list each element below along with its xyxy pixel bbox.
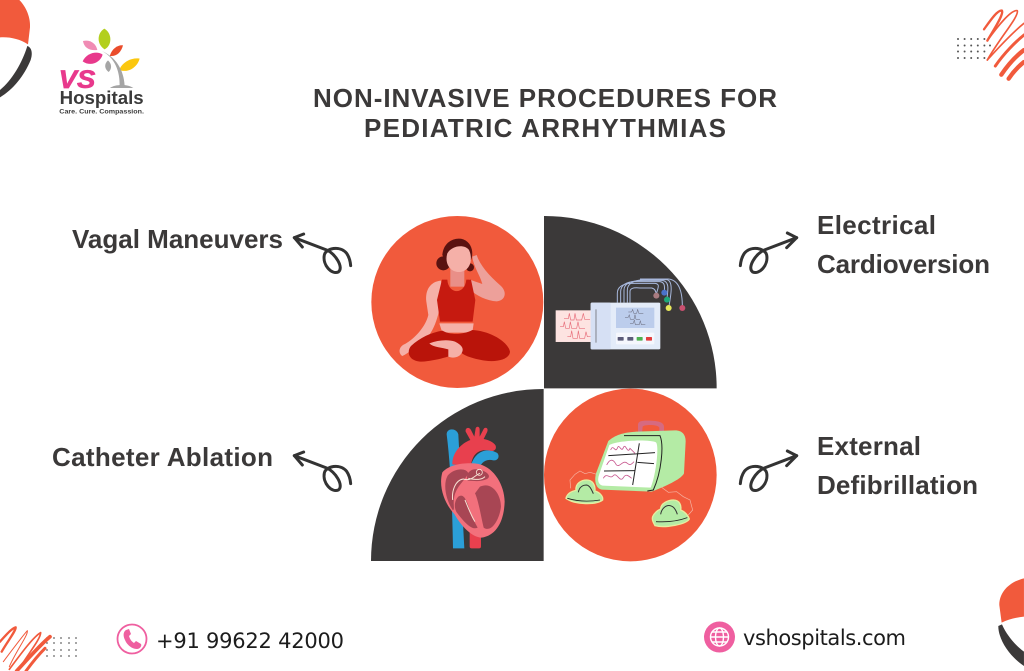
arrow: to External Defibrillation — [740, 451, 797, 491]
text: phone number: +91 99622 42000 — [156, 629, 344, 653]
logo: VS Hospitals: VS — [59, 66, 95, 94]
logo: VS Hospitals — [59, 29, 144, 116]
text: website: vshospitals.com — [743, 626, 906, 650]
panel: external defibrillation circle — [544, 389, 717, 561]
label: Electrical Cardioversion — [817, 210, 990, 279]
decoration: bottom-right petal — [998, 578, 1024, 666]
title — [313, 83, 777, 143]
label: External Defibrillation: External — [817, 431, 921, 461]
arrow: to Vagal Maneuvers — [294, 234, 351, 273]
title: PEDIATRIC ARRHYTHMIAS — [364, 113, 726, 143]
title: NON-INVASIVE PROCEDURES FOR — [313, 83, 777, 113]
logo: VS Hospitals: Hospitals — [60, 87, 144, 108]
label: Catheter Ablation: Catheter Ablation — [52, 442, 273, 472]
label: External Defibrillation — [817, 431, 978, 500]
decoration: top-left petal — [0, 0, 32, 97]
illustration quadrant grid — [371, 216, 717, 561]
label: Electrical Cardioversion: Electrical — [817, 210, 936, 240]
panel: breathing exercise circle — [371, 216, 543, 388]
icon: globe — [704, 622, 735, 652]
logo: VS Hospitals: Care. Cure. Compassion. — [59, 109, 144, 116]
panel: electrical cardioversion quadrant — [544, 216, 717, 388]
label: Vagal Maneuvers: Vagal Maneuvers — [72, 224, 283, 254]
arrow: to Electrical Cardioversion — [740, 233, 797, 273]
arrow: to Catheter Ablation — [294, 452, 351, 491]
label: Electrical Cardioversion: Cardioversion — [817, 249, 990, 279]
decoration: top-right scribble and dots — [957, 11, 1024, 79]
label: External Defibrillation: Defibrillation — [817, 470, 978, 500]
panel: catheter ablation quadrant — [371, 389, 544, 561]
decoration: bottom-left scribble and dots — [0, 627, 77, 671]
icon: phone — [118, 624, 146, 654]
